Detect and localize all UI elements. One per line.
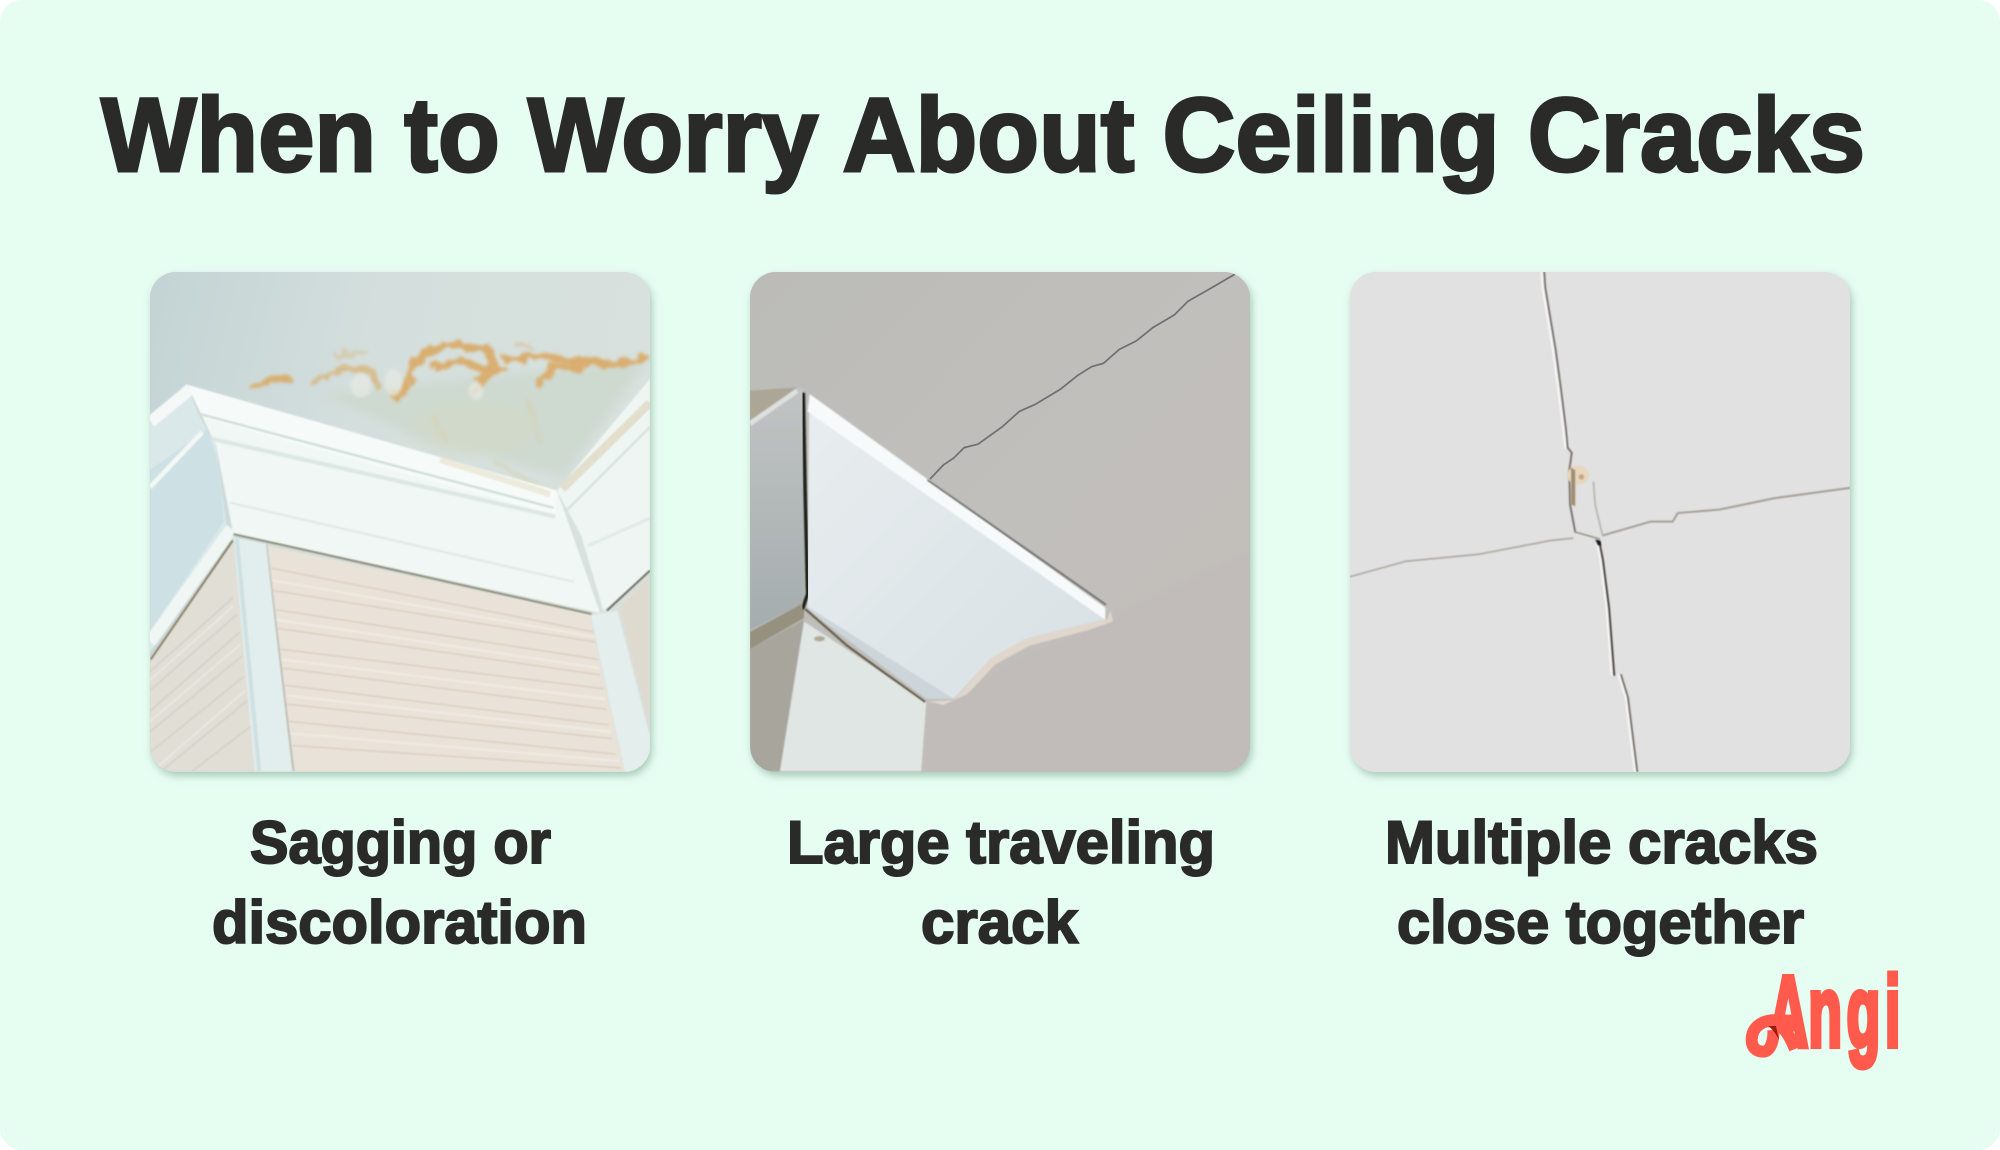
photo: intersecting cracks [1350,272,1850,772]
caption: sagging or discoloration: Sagging or [250,809,551,876]
left moulding faces [750,387,926,771]
panel: multiple cracks close together [1350,272,1850,956]
caption: sagging or discoloration: discoloration [212,889,587,956]
left moulding [150,384,232,653]
right moulding [557,379,650,611]
photo: crack running from crown moulding [750,272,1250,772]
crack line [930,274,1235,479]
logo: Angi: Angi [1768,957,1900,1068]
caption: sagging or discoloration [212,809,587,956]
photo: water-stained crown moulding [150,272,650,772]
caption: large traveling crack: Large traveling [787,809,1215,876]
caption: multiple cracks close together: Multiple cracks [1385,809,1818,876]
stain [252,344,647,396]
caption: large traveling crack [787,809,1215,956]
caption: large traveling crack: crack [921,889,1079,956]
title: When to Worry About Ceiling Cracks [101,77,1865,194]
caption: multiple cracks close together [1385,809,1818,956]
caption: multiple cracks close together: close together [1397,889,1804,956]
cornice face [808,394,1113,705]
main crown moulding [187,385,600,613]
panel: large traveling crack [750,272,1250,956]
panel: sagging or discoloration [150,272,650,956]
tiled walls [150,537,650,771]
